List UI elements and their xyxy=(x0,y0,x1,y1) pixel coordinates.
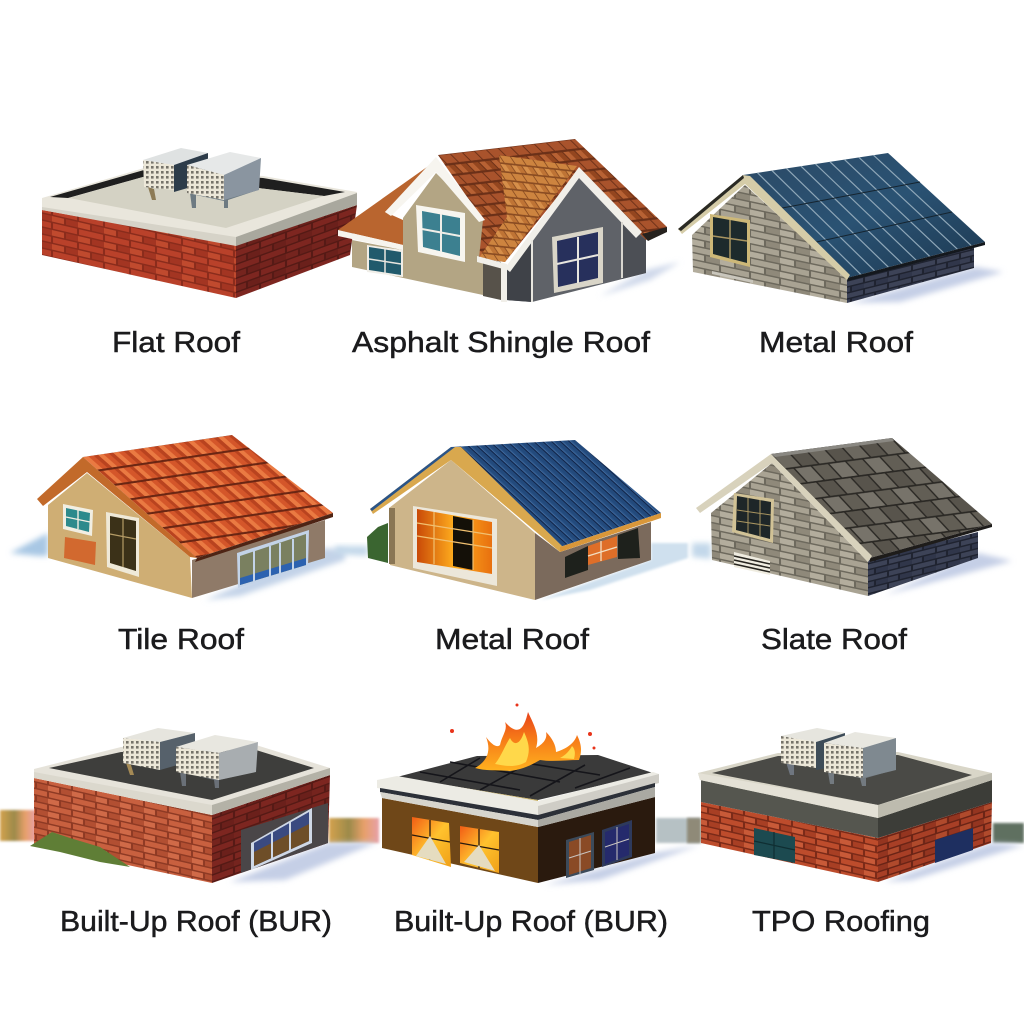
label: Built-Up Roof (BUR): Built-Up Roof (BUR) xyxy=(394,906,668,938)
icon: flames xyxy=(450,704,596,771)
icon: TPO building xyxy=(687,728,1024,882)
label: Metal Roof: Metal Roof xyxy=(759,327,914,359)
icon: flat roof building xyxy=(42,148,357,298)
label: Slate Roof: Slate Roof xyxy=(761,624,908,656)
panel: metal roof (blue) xyxy=(335,440,688,656)
panel: flat roof xyxy=(42,148,357,359)
label: Asphalt Shingle Roof: Asphalt Shingle Roof xyxy=(352,327,651,359)
label: Tile Roof: Tile Roof xyxy=(118,624,245,656)
label: Built-Up Roof (BUR): Built-Up Roof (BUR) xyxy=(60,906,332,938)
label: Metal Roof: Metal Roof xyxy=(435,624,590,656)
icon: blue metal roof house xyxy=(335,440,688,600)
panel: tile roof xyxy=(10,435,345,656)
icon: metal roof stone house xyxy=(678,153,1003,303)
icon: shingle roof house xyxy=(338,139,680,302)
panel: asphalt shingle roof xyxy=(338,139,680,359)
panel: slate roof xyxy=(692,438,1012,656)
panel: built-up roof (fire) xyxy=(377,704,700,938)
icon: tile roof house xyxy=(10,435,345,600)
panel: TPO roofing xyxy=(687,728,1024,938)
icon: BUR building with fire xyxy=(377,704,700,885)
icon: slate roof house xyxy=(692,438,1012,596)
icon: BUR brick building xyxy=(0,728,379,883)
label: Flat Roof: Flat Roof xyxy=(112,327,241,359)
label: TPO Roofing: TPO Roofing xyxy=(752,906,930,938)
panel: built-up roof (brick) xyxy=(0,728,379,938)
panel: metal roof (stone) xyxy=(678,153,1003,359)
